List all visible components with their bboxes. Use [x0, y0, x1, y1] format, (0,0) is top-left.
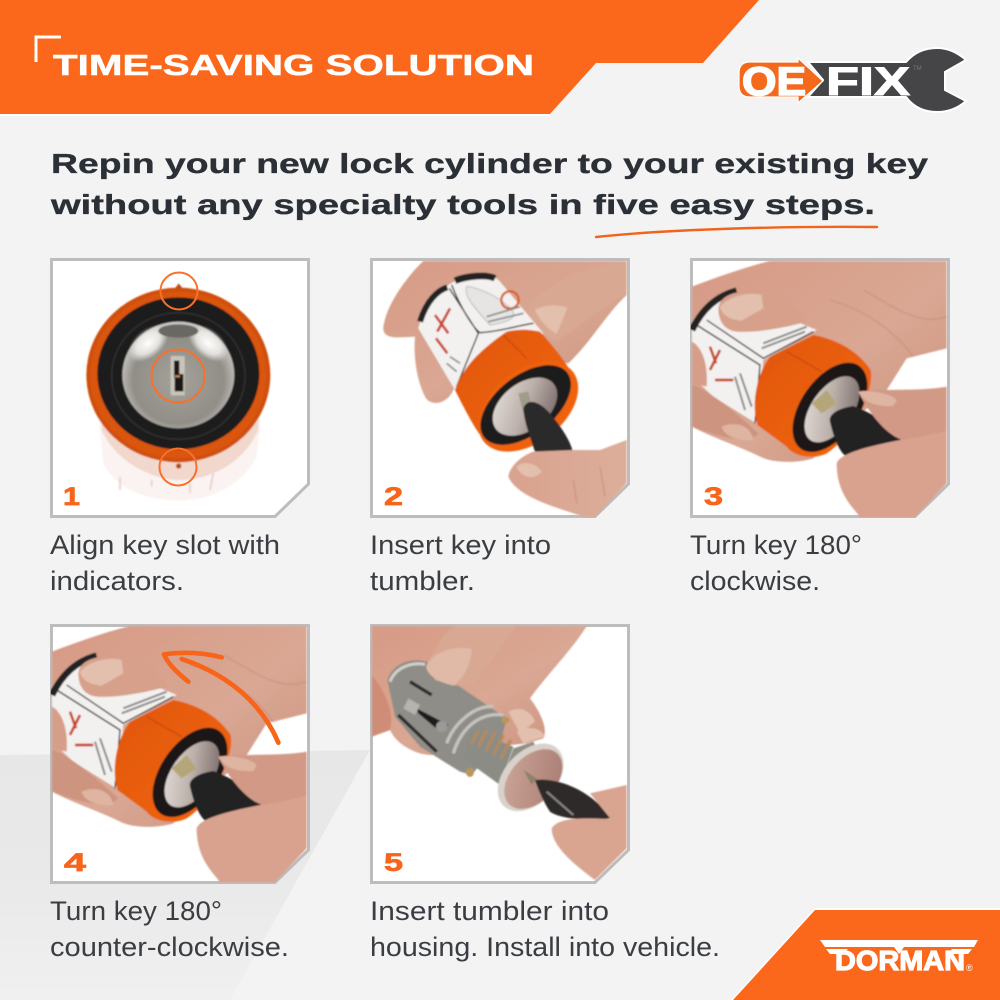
panel: step 3	[692, 260, 948, 518]
step 1 photo: lock cylinder top view	[86, 283, 270, 501]
caption: step 3	[690, 530, 862, 596]
OE text: OE	[742, 60, 806, 104]
step 2 frame	[372, 260, 628, 516]
heading	[50, 148, 929, 237]
panel: step 1	[52, 260, 308, 516]
heading line 2: without any specialty tools in five easy steps.	[50, 189, 875, 220]
heading line 1: Repin your new lock cylinder to your existing key	[51, 148, 929, 179]
step number 5: 5	[384, 849, 403, 877]
step number 2: 2	[384, 483, 403, 511]
caption: step 3: clockwise.	[690, 566, 820, 596]
caption: step 5: housing. Install into vehicle.	[370, 932, 720, 962]
FIX text: FIX	[826, 60, 910, 104]
panel: step 4	[52, 626, 308, 883]
caption: step 4	[50, 896, 289, 962]
panel: step 2	[372, 260, 628, 518]
wrench and bar	[808, 48, 966, 112]
caption: step 5: Insert tumbler into	[370, 896, 609, 926]
OE FIX logo	[739, 48, 966, 112]
logo text: DORMAN	[835, 945, 965, 976]
step 4 frame	[52, 626, 308, 882]
indicator circle: top notch	[160, 272, 198, 310]
step number 3: 3	[704, 483, 723, 511]
indicator circle: key slot	[152, 350, 204, 402]
hand-drawn underline	[596, 227, 877, 237]
caption: step 1: indicators.	[50, 566, 184, 596]
header banner	[0, 0, 759, 114]
caption: step 3: Turn key 180°	[690, 530, 862, 560]
step number 4: 4	[64, 849, 86, 877]
caption: step 5	[370, 896, 720, 962]
trademark: TM	[913, 66, 922, 72]
registered mark: ®	[966, 963, 973, 973]
title text: TIME-SAVING SOLUTION	[53, 50, 534, 82]
footer corner with Dorman logo	[731, 908, 1000, 1000]
orange arrow	[739, 58, 823, 103]
step 3 photo: turning key clockwise	[692, 261, 947, 518]
arrow: counter-clockwise	[164, 653, 278, 743]
step 1 frame	[52, 260, 308, 516]
caption: step 1	[50, 530, 280, 596]
step 5 frame	[372, 626, 628, 882]
orange corner	[731, 908, 1000, 1000]
indicator circle: bottom notch	[160, 448, 196, 486]
step 4 photo: turning key counter-clockwise	[52, 626, 307, 883]
caption: step 1: Align key slot with	[50, 530, 280, 560]
caption: step 2: Insert key into	[370, 530, 551, 560]
step 5 photo: tumbler into housing	[372, 626, 627, 880]
title	[36, 37, 534, 82]
caption: step 2: tumbler.	[370, 566, 475, 596]
panel: step 5	[372, 626, 628, 882]
caption: step 4: Turn key 180°	[50, 896, 222, 926]
caption: step 2	[370, 530, 551, 596]
logo wings	[820, 940, 978, 954]
step 3 frame	[692, 260, 948, 516]
caption: step 4: counter-clockwise.	[50, 932, 289, 962]
title corner bracket	[36, 37, 61, 62]
step 2 photo: inserting key	[383, 261, 627, 518]
banner bottom edge	[0, 114, 550, 116]
step number 1: 1	[63, 483, 80, 511]
